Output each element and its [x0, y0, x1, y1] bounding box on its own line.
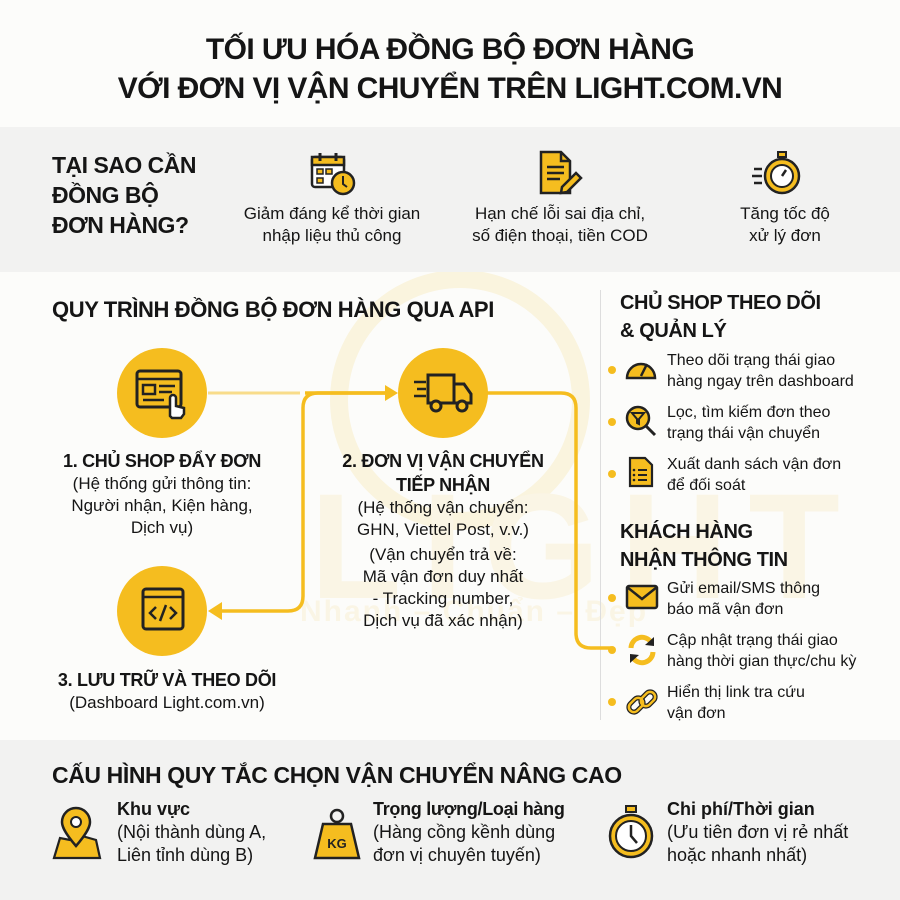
rule: region: (Nội thành dùng A,: [117, 822, 266, 842]
step 2 text: [342, 450, 544, 630]
watermark: LIGHT: [310, 462, 860, 630]
step 2 text: (Vận chuyển trả về:: [369, 545, 517, 564]
step 2 text: 2. ĐƠN VỊ VẬN CHUYỂN: [342, 451, 544, 471]
heading: shop owner: & QUẢN LÝ: [620, 320, 726, 342]
rule: region: Liên tỉnh dùng B): [117, 845, 253, 865]
heading: why: [52, 152, 196, 238]
panel: shop owner tracking: [608, 290, 854, 494]
step 1 text: Người nhận, Kiện hàng,: [71, 496, 253, 515]
text: reduce time: Giảm đáng kể thời gian: [244, 204, 420, 223]
item: filter: [608, 404, 830, 442]
text: reduce errors: [472, 204, 648, 245]
item: refresh: Cập nhật trạng thái giao: [667, 632, 838, 649]
heading: why: ĐƠN HÀNG?: [52, 212, 188, 238]
step 2 text: Dịch vụ đã xác nhận): [363, 611, 523, 630]
step 1 text: Dịch vụ): [131, 518, 193, 537]
heading: customer: KHÁCH HÀNG: [620, 521, 753, 543]
item: link: Hiển thị link tra cứu: [667, 684, 805, 701]
step 1 text: [63, 450, 261, 537]
divider: [600, 290, 601, 720]
title: VỚI ĐƠN VỊ VẬN CHUYỂN TRÊN LIGHT.COM.VN: [118, 72, 782, 105]
title: [118, 32, 782, 105]
heading: advanced rules: CẤU HÌNH QUY TẮC CHỌN VẬN CHUYỂN NÂNG CAO: [52, 762, 622, 788]
icon: stopwatch: [752, 151, 800, 194]
item: filter: Lọc, tìm kiếm đơn theo: [667, 404, 830, 421]
panel: customer info: [608, 520, 856, 722]
item: email: báo mã vận đơn: [667, 601, 783, 618]
item: export: Xuất danh sách vận đơn: [667, 456, 841, 473]
step 2 text: Mã vận đơn duy nhất: [363, 567, 523, 586]
item: refresh: hàng thời gian thực/chu kỳ: [667, 653, 856, 670]
rule: cost/time: hoặc nhanh nhất): [667, 845, 807, 865]
icon: document pencil: [540, 150, 583, 194]
heading: why: TẠI SAO CẦN: [52, 152, 196, 178]
text: speed: Tăng tốc độ: [740, 204, 830, 223]
item: dashboard: Theo dõi trạng thái giao: [667, 352, 835, 369]
heading: shop owner: [620, 290, 821, 342]
rule: weight: đơn vị chuyên tuyến): [373, 845, 541, 865]
step 3 circle icon: code window: [117, 566, 207, 656]
panel: advanced rules: [0, 740, 900, 900]
heading: process: QUY TRÌNH ĐỒNG BỘ ĐƠN HÀNG QUA API: [52, 297, 494, 322]
watermark: [300, 272, 860, 630]
panel: why sync: [0, 127, 900, 272]
item: export: để đối soát: [667, 477, 745, 494]
heading: customer: [620, 520, 788, 571]
rule: weight: Trọng lượng/Loại hàng: [373, 799, 565, 819]
title: TỐI ƯU HÓA ĐỒNG BỘ ĐƠN HÀNG: [206, 33, 694, 66]
item: filter: trạng thái vận chuyển: [667, 425, 820, 442]
rule: region: Khu vực: [117, 799, 190, 819]
step 3 text: (Dashboard Light.com.vn): [69, 693, 265, 712]
heading: shop owner: CHỦ SHOP THEO DÕI: [620, 292, 821, 314]
step 2 text: - Tracking number,: [373, 589, 513, 608]
item: refresh: [608, 632, 856, 670]
rule: cost/time: [608, 799, 848, 865]
step 3 text: [58, 670, 276, 712]
text: reduce time: [244, 204, 420, 245]
step 3 text: 3. LƯU TRỮ VÀ THEO DÕI: [58, 670, 276, 690]
step 1 text: (Hệ thống gửi thông tin:: [73, 474, 251, 493]
watermark: Nhanh – Chuẩn – Đẹp: [300, 595, 648, 628]
text: reduce time: nhập liệu thủ công: [263, 226, 401, 245]
step 1 circle icon: browser click: [117, 348, 207, 438]
item: dashboard: [608, 352, 854, 390]
item: email: [608, 580, 820, 618]
item: email: Gửi email/SMS thông: [667, 580, 820, 597]
step 2 text: (Hệ thống vận chuyển:: [357, 498, 529, 517]
text: speed: [740, 204, 830, 245]
text: speed: xử lý đơn: [749, 226, 821, 245]
item: export: [608, 456, 841, 494]
icon: calendar: [310, 153, 356, 196]
rule: cost/time: Chi phí/Thời gian: [667, 799, 815, 819]
rule: weight: KG: [327, 836, 347, 851]
heading: why: ĐỒNG BỘ: [52, 182, 158, 208]
text: reduce errors: Hạn chế lỗi sai địa chỉ,: [475, 204, 645, 223]
step 2 text: GHN, Viettel Post, v.v.): [357, 520, 529, 539]
rule: cost/time: (Ưu tiên đơn vị rẻ nhất: [667, 822, 848, 842]
step 1 text: 1. CHỦ SHOP ĐẨY ĐƠN: [63, 451, 261, 471]
heading: customer: NHẬN THÔNG TIN: [620, 549, 788, 571]
step 2 circle icon: truck: [398, 348, 488, 438]
item: link: vận đơn: [667, 705, 726, 722]
text: reduce errors: số điện thoại, tiền COD: [472, 226, 648, 245]
item: link: [608, 684, 805, 722]
rule: weight: (Hàng cồng kềnh dùng: [373, 822, 555, 842]
rule: weight: [313, 799, 565, 865]
step 2 text: TIẾP NHẬN: [396, 475, 490, 495]
rule: region: [52, 799, 266, 865]
item: dashboard: hàng ngay trên dashboard: [667, 373, 854, 390]
